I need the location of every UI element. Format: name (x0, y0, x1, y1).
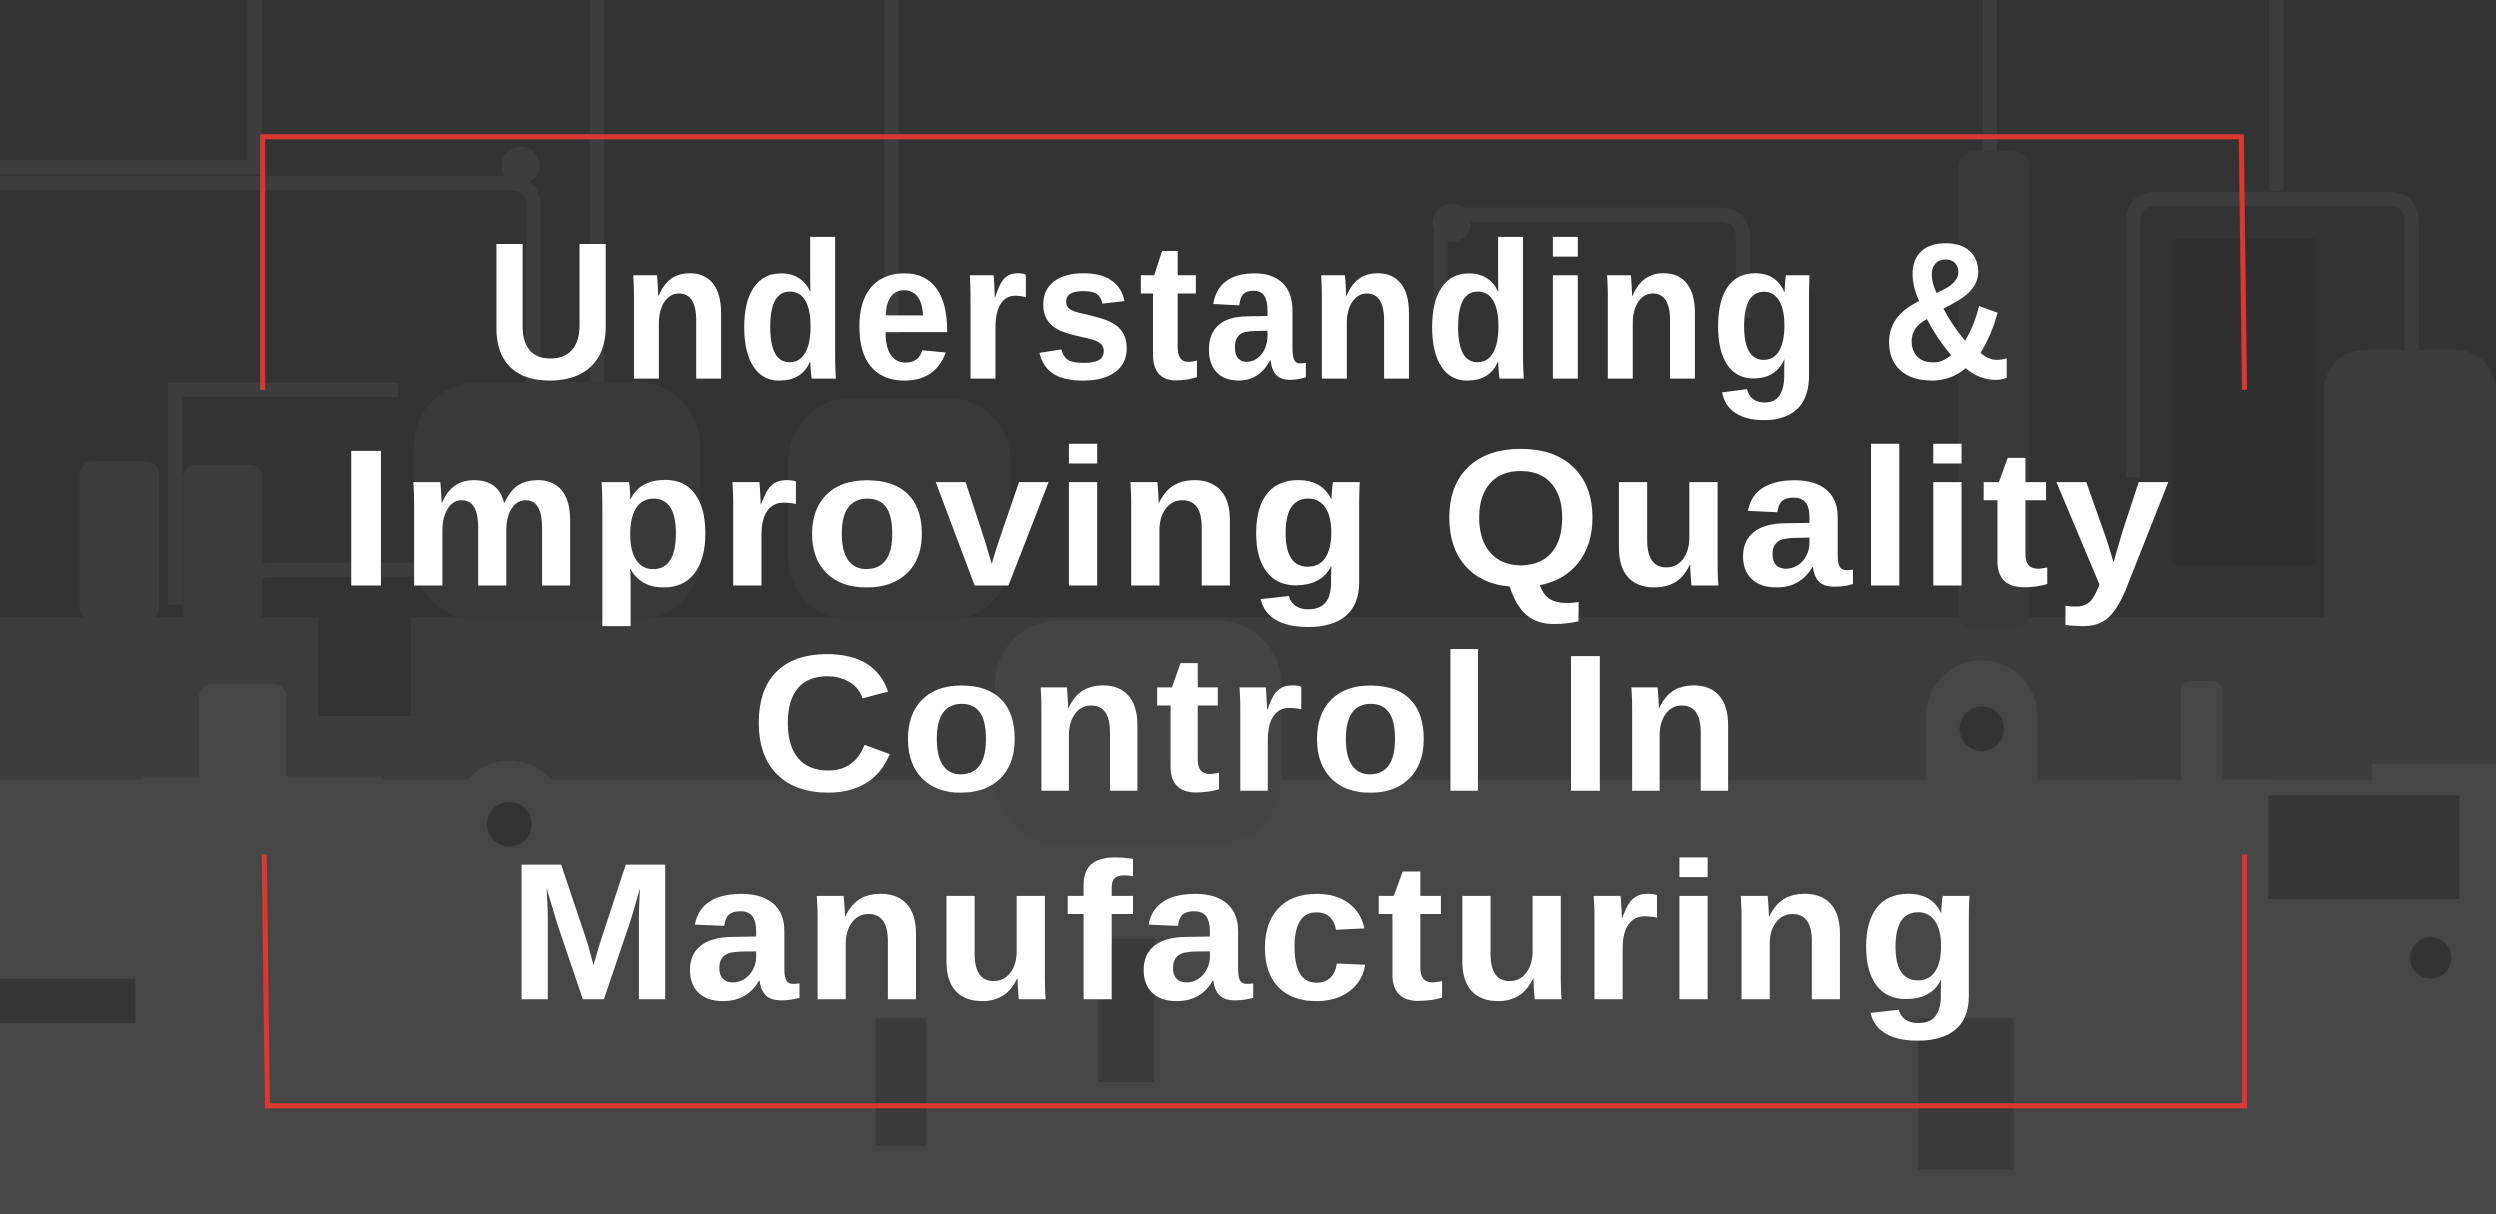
red frame top bracket (263, 137, 2244, 390)
red frame bottom bracket (264, 854, 2244, 1106)
title: Improving Quality (337, 410, 2174, 628)
title (337, 203, 2174, 1041)
title: Control In (751, 615, 1745, 833)
title: Understanding & (486, 203, 2017, 421)
title: Manufacturing (508, 823, 1988, 1041)
